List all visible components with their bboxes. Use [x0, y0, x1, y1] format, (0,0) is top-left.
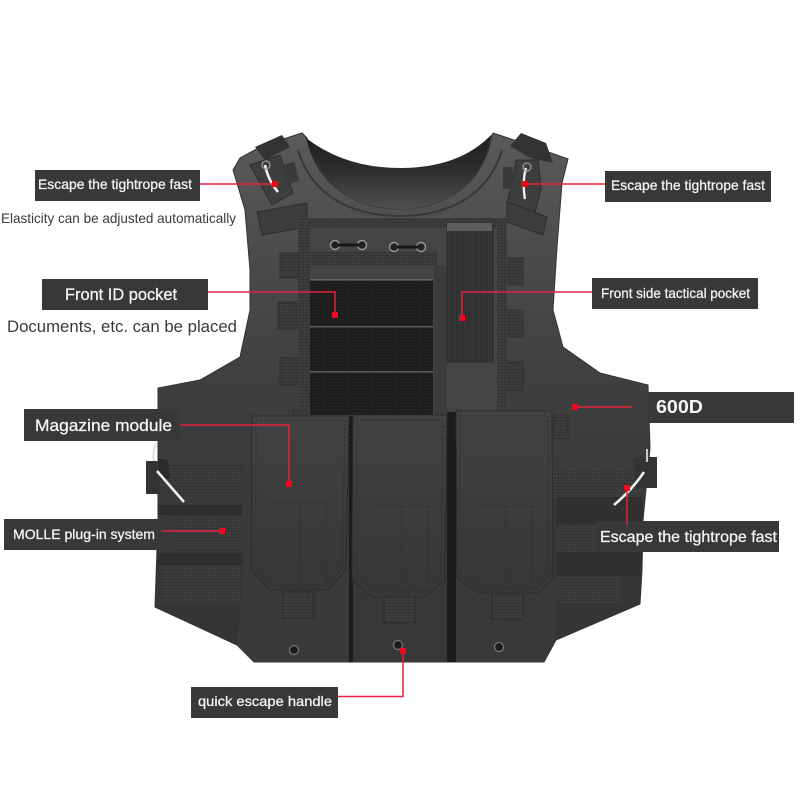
- callout: MOLLE plug-in system: MOLLE plug-in system: [13, 526, 155, 542]
- callout: escape the tightrope, top right: Escape the tightrope fast: [611, 177, 765, 193]
- callout: escape the tightrope, top left: [35, 170, 278, 201]
- callout: magazine module: [24, 409, 292, 487]
- right side buckle and wire: [614, 449, 657, 505]
- callout: 600D fabric: 600D: [656, 397, 703, 417]
- magazine pouch bodies: [237, 412, 556, 662]
- lacing eyelets: [330, 240, 426, 252]
- front admin panel: [298, 218, 507, 418]
- callout: escape the tightrope, top right: [521, 171, 771, 202]
- pouch pull tabs: [283, 592, 523, 623]
- callout: front ID pocket: Front ID pocket: [65, 285, 177, 304]
- callout: quick escape handle: [191, 648, 406, 718]
- callout: escape the tightrope, top left: Escape the tightrope fast: [38, 176, 192, 192]
- callout: magazine module: Magazine module: [35, 416, 172, 435]
- right shoulder strap and buckle: [503, 133, 553, 213]
- shoulder velcro straps: [257, 202, 547, 235]
- callout: escape the tightrope, lower right: Escape the tightrope fast: [600, 529, 778, 546]
- vest illustration: [146, 133, 657, 662]
- note: elasticity: Elasticity can be adjusted automatically: [1, 210, 236, 226]
- side tactical pocket: [447, 223, 493, 362]
- left shoulder strap and buckle: [250, 135, 299, 205]
- molle webbing left: [158, 463, 244, 602]
- neck opening: [306, 134, 492, 209]
- callout: front ID pocket: [42, 279, 338, 318]
- molle webbing right: [554, 469, 643, 604]
- left side buckle and wire: [146, 444, 184, 502]
- molle loops on chest: [278, 253, 568, 439]
- magazine pouch flaps: [251, 411, 553, 597]
- callout: escape the tightrope, lower right: [596, 485, 779, 552]
- pouch grommets: [290, 640, 504, 654]
- callout: front side tactical pocket: [459, 278, 758, 321]
- callout: front side tactical pocket: Front side tactical pocket: [601, 285, 750, 301]
- note: documents: Documents, etc. can be placed: [7, 317, 237, 336]
- callout: quick escape handle: quick escape handle: [198, 693, 332, 709]
- flap stitching: [256, 416, 549, 592]
- callout: 600D fabric: [572, 392, 794, 423]
- vest body: [155, 133, 650, 662]
- callout: MOLLE plug-in system: [4, 519, 225, 550]
